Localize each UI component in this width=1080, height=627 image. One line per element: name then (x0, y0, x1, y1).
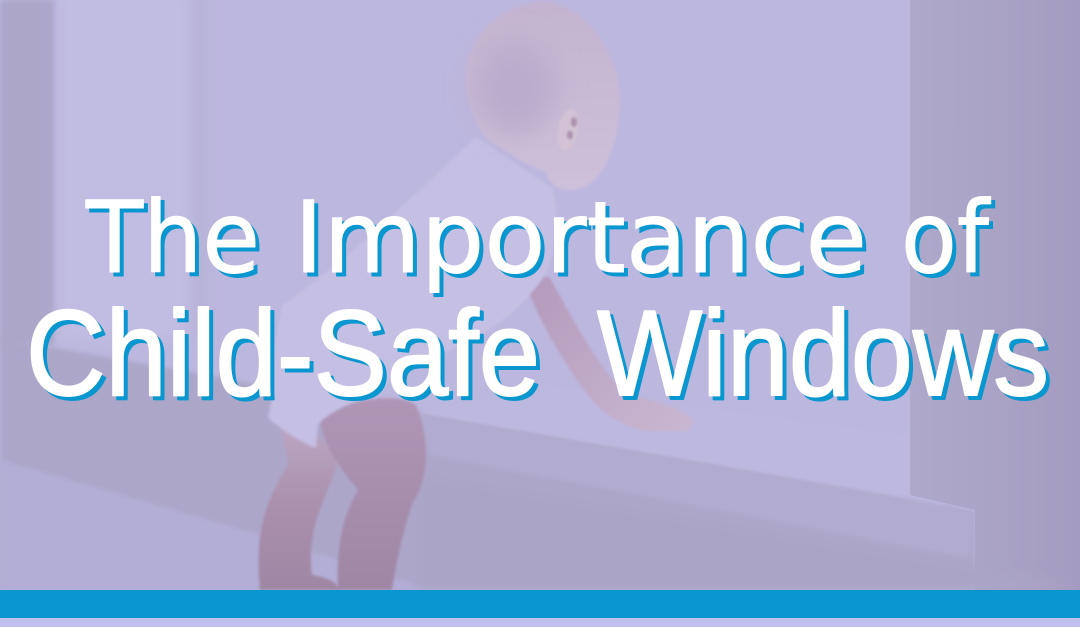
lower right floor (420, 475, 1080, 590)
baby ear (555, 108, 581, 152)
floor (0, 460, 430, 590)
baby left leg (258, 418, 340, 590)
title line 2 (26, 285, 1049, 421)
baby head (466, 1, 620, 190)
baby onesie (268, 137, 557, 448)
title line 2: Child-Safe (26, 285, 540, 421)
right wall (910, 0, 1080, 590)
title line 1: of (901, 181, 991, 296)
title line 1 (85, 181, 991, 296)
left wall (0, 0, 55, 345)
lower lavender strip (0, 618, 1080, 627)
baby right leg (320, 398, 426, 590)
window frame left (58, 0, 208, 340)
blue stripe (0, 590, 1080, 618)
sill front lip (420, 413, 975, 558)
title line 2: Windows (597, 285, 1049, 421)
title (26, 181, 1049, 421)
window sill top and face (0, 338, 975, 590)
title line 1: The (85, 181, 260, 296)
baby arm (520, 270, 694, 431)
baby hair shading (475, 42, 555, 134)
sill top surface (420, 385, 908, 496)
title line 1: Importance (294, 181, 867, 296)
